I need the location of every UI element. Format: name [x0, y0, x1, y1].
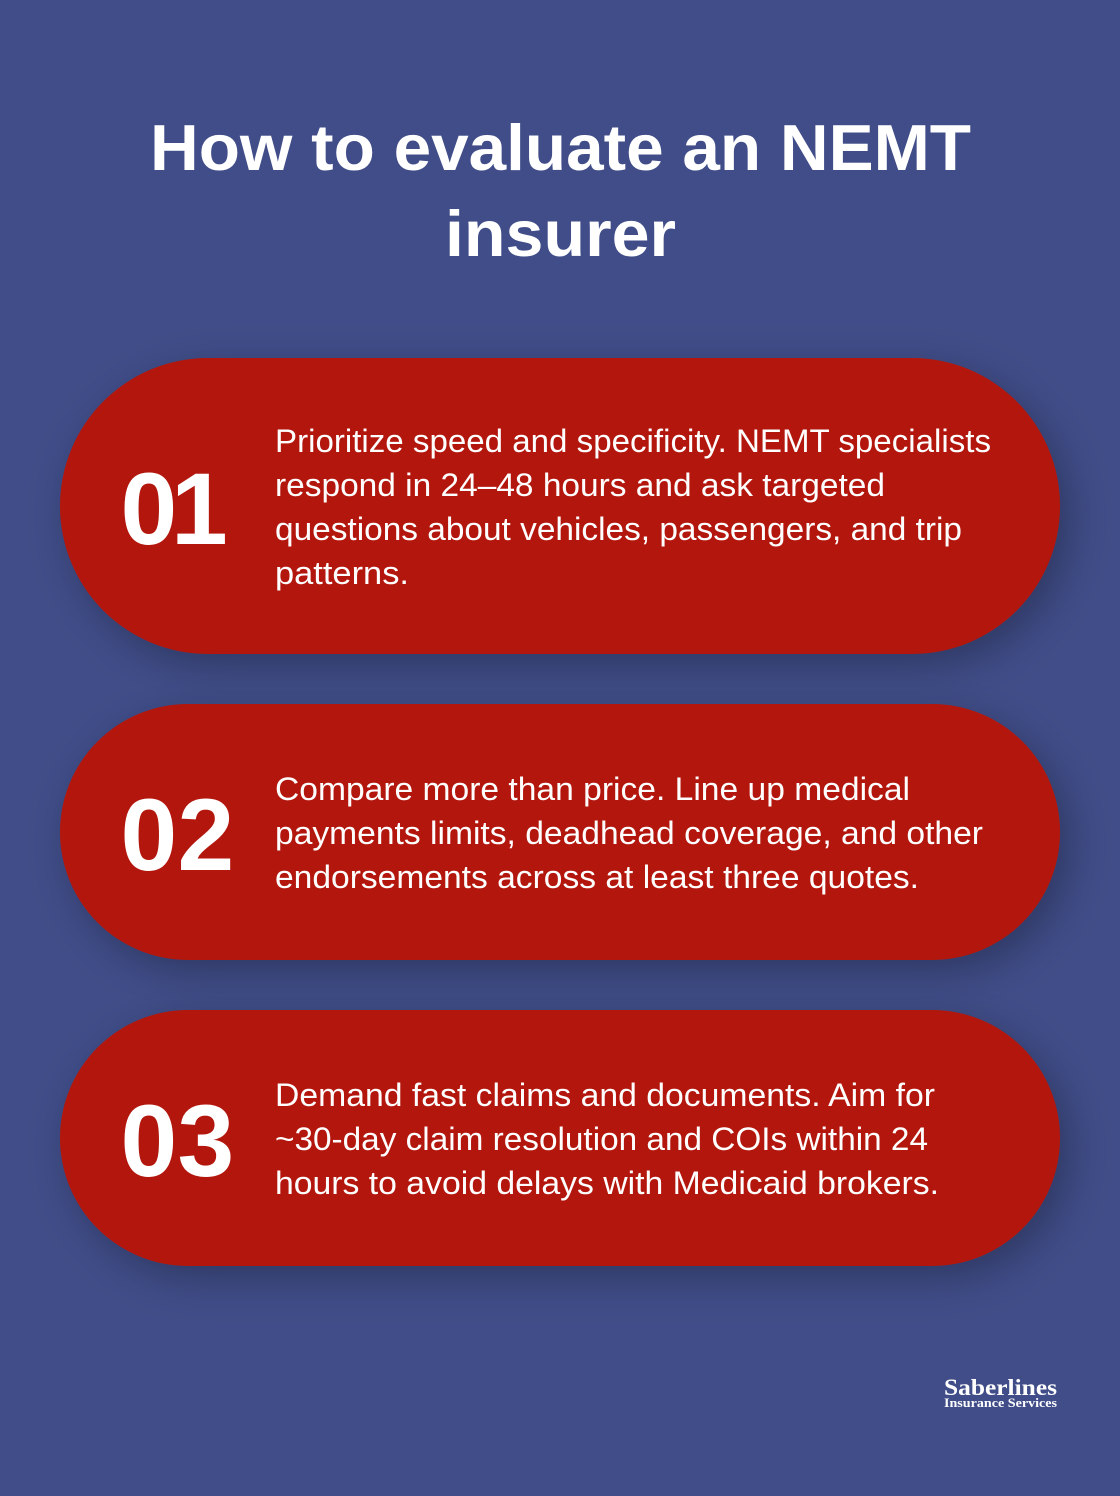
panel: step 03 — [60, 1010, 1060, 1266]
step 02 description — [275, 771, 983, 895]
step 01 description: patterns. — [275, 555, 409, 591]
logo: Saberlines Insurance Services — [944, 1375, 1057, 1410]
step 01 description: Prioritize speed and specificity. NEMT specialists — [275, 423, 991, 459]
title — [150, 111, 971, 270]
step 02 description: endorsements across at least three quotes. — [275, 859, 919, 895]
title: insurer — [445, 197, 676, 270]
step 03 description: Demand fast claims and documents. Aim for — [275, 1077, 935, 1113]
step 01 description — [275, 423, 991, 591]
step number 01: 01 — [120, 452, 228, 566]
step 01 description: respond in 24–48 hours and ask targeted — [275, 467, 885, 503]
step 03 description: ~30-day claim resolution and COIs within 24 — [275, 1121, 928, 1157]
panel: step 02 — [60, 704, 1060, 960]
logo: Saberlines Insurance Services: Insurance Services — [944, 1396, 1057, 1410]
logo: Saberlines Insurance Services: Saberlines — [944, 1375, 1057, 1400]
title: How to evaluate an NEMT — [150, 111, 971, 184]
step 02 description: payments limits, deadhead coverage, and other — [275, 815, 983, 851]
step number 02: 02 — [120, 778, 234, 892]
panel: step 01 — [60, 358, 1060, 654]
step 01 description: questions about vehicles, passengers, and trip — [275, 511, 962, 547]
step 02 description: Compare more than price. Line up medical — [275, 771, 910, 807]
step number 03: 03 — [120, 1084, 234, 1198]
step 03 description — [275, 1077, 939, 1201]
step 03 description: hours to avoid delays with Medicaid brokers. — [275, 1165, 939, 1201]
